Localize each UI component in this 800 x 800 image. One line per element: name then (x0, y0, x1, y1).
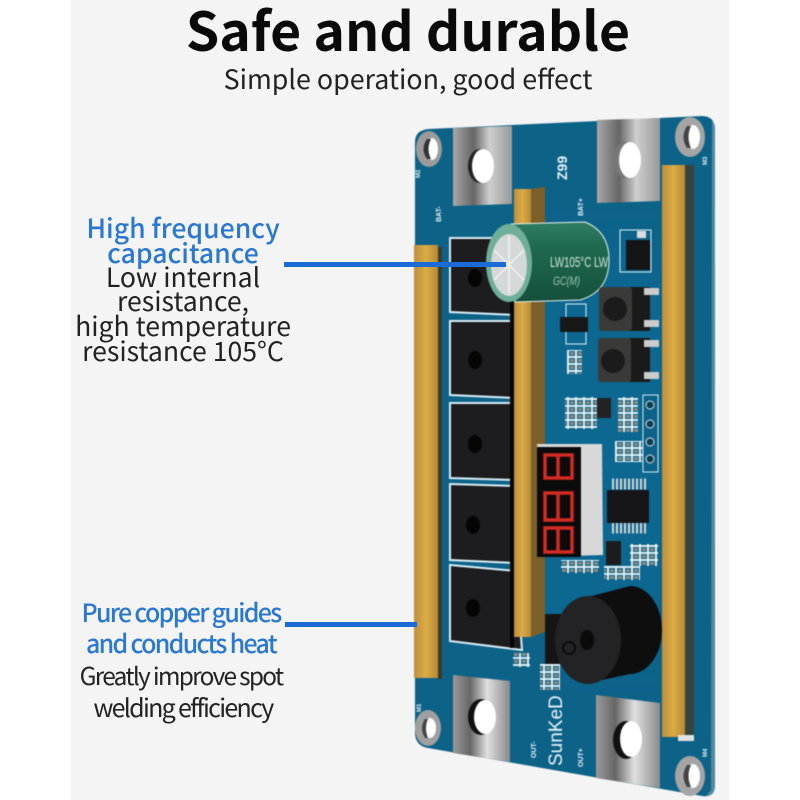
copper bar: middle (514, 187, 545, 637)
copper bar: left (414, 245, 442, 679)
MOSFETs (450, 238, 522, 650)
7-segment display (537, 444, 603, 557)
buzzer (545, 586, 662, 684)
board silkscreen labels: BAT- (436, 206, 443, 222)
leader line: copper (285, 622, 417, 627)
callout: high frequency capacitance: high temperature (75, 305, 291, 344)
metal pads (453, 118, 660, 788)
callout: pure copper: Greatly improve spot (80, 658, 282, 693)
callout: high frequency capacitance: capacitance (107, 232, 259, 271)
board silkscreen labels (416, 156, 709, 767)
board silkscreen labels: OUT- (531, 741, 538, 758)
callout: high frequency capacitance: High frequency (86, 207, 280, 246)
callout: pure copper: welding efficiency (93, 689, 273, 725)
MOSFET pins and holes (466, 238, 514, 648)
callout: high frequency capacitance: resistance 105°C (82, 330, 284, 369)
corner screw holes (415, 117, 705, 796)
small components (513, 230, 658, 690)
board silkscreen labels: SunKeD (546, 695, 567, 766)
callout: pure copper: Pure copper guides (81, 594, 281, 630)
board silkscreen labels: M2 (416, 169, 422, 178)
capacitor: LW105°C LW (550, 254, 609, 271)
copper bar: right (662, 165, 694, 741)
callout: high frequency capacitance: resistance, (117, 280, 249, 319)
callout: high frequency capacitance (75, 207, 291, 369)
callout: pure copper: and conducts heat (86, 625, 276, 661)
pad holes (468, 142, 642, 759)
board silkscreen labels: M4 (703, 748, 709, 757)
tactile buttons (598, 287, 659, 382)
SMD IC (607, 484, 649, 528)
callout: pure copper (80, 594, 284, 725)
board silkscreen labels: Z99 (554, 156, 570, 180)
board silkscreen labels: M1 (417, 703, 423, 712)
board silkscreen labels: M3 (703, 156, 709, 165)
capacitor: GC(M) (553, 274, 580, 288)
capacitor (486, 222, 609, 302)
leader line: capacitance (284, 262, 506, 267)
callout: high frequency capacitance: Low internal (106, 256, 260, 295)
board silkscreen labels: OUT+ (578, 748, 585, 767)
board (415, 116, 715, 796)
board silkscreen labels: BAT+ (578, 198, 585, 216)
subtitle: Simple operation, good effect (224, 58, 592, 97)
